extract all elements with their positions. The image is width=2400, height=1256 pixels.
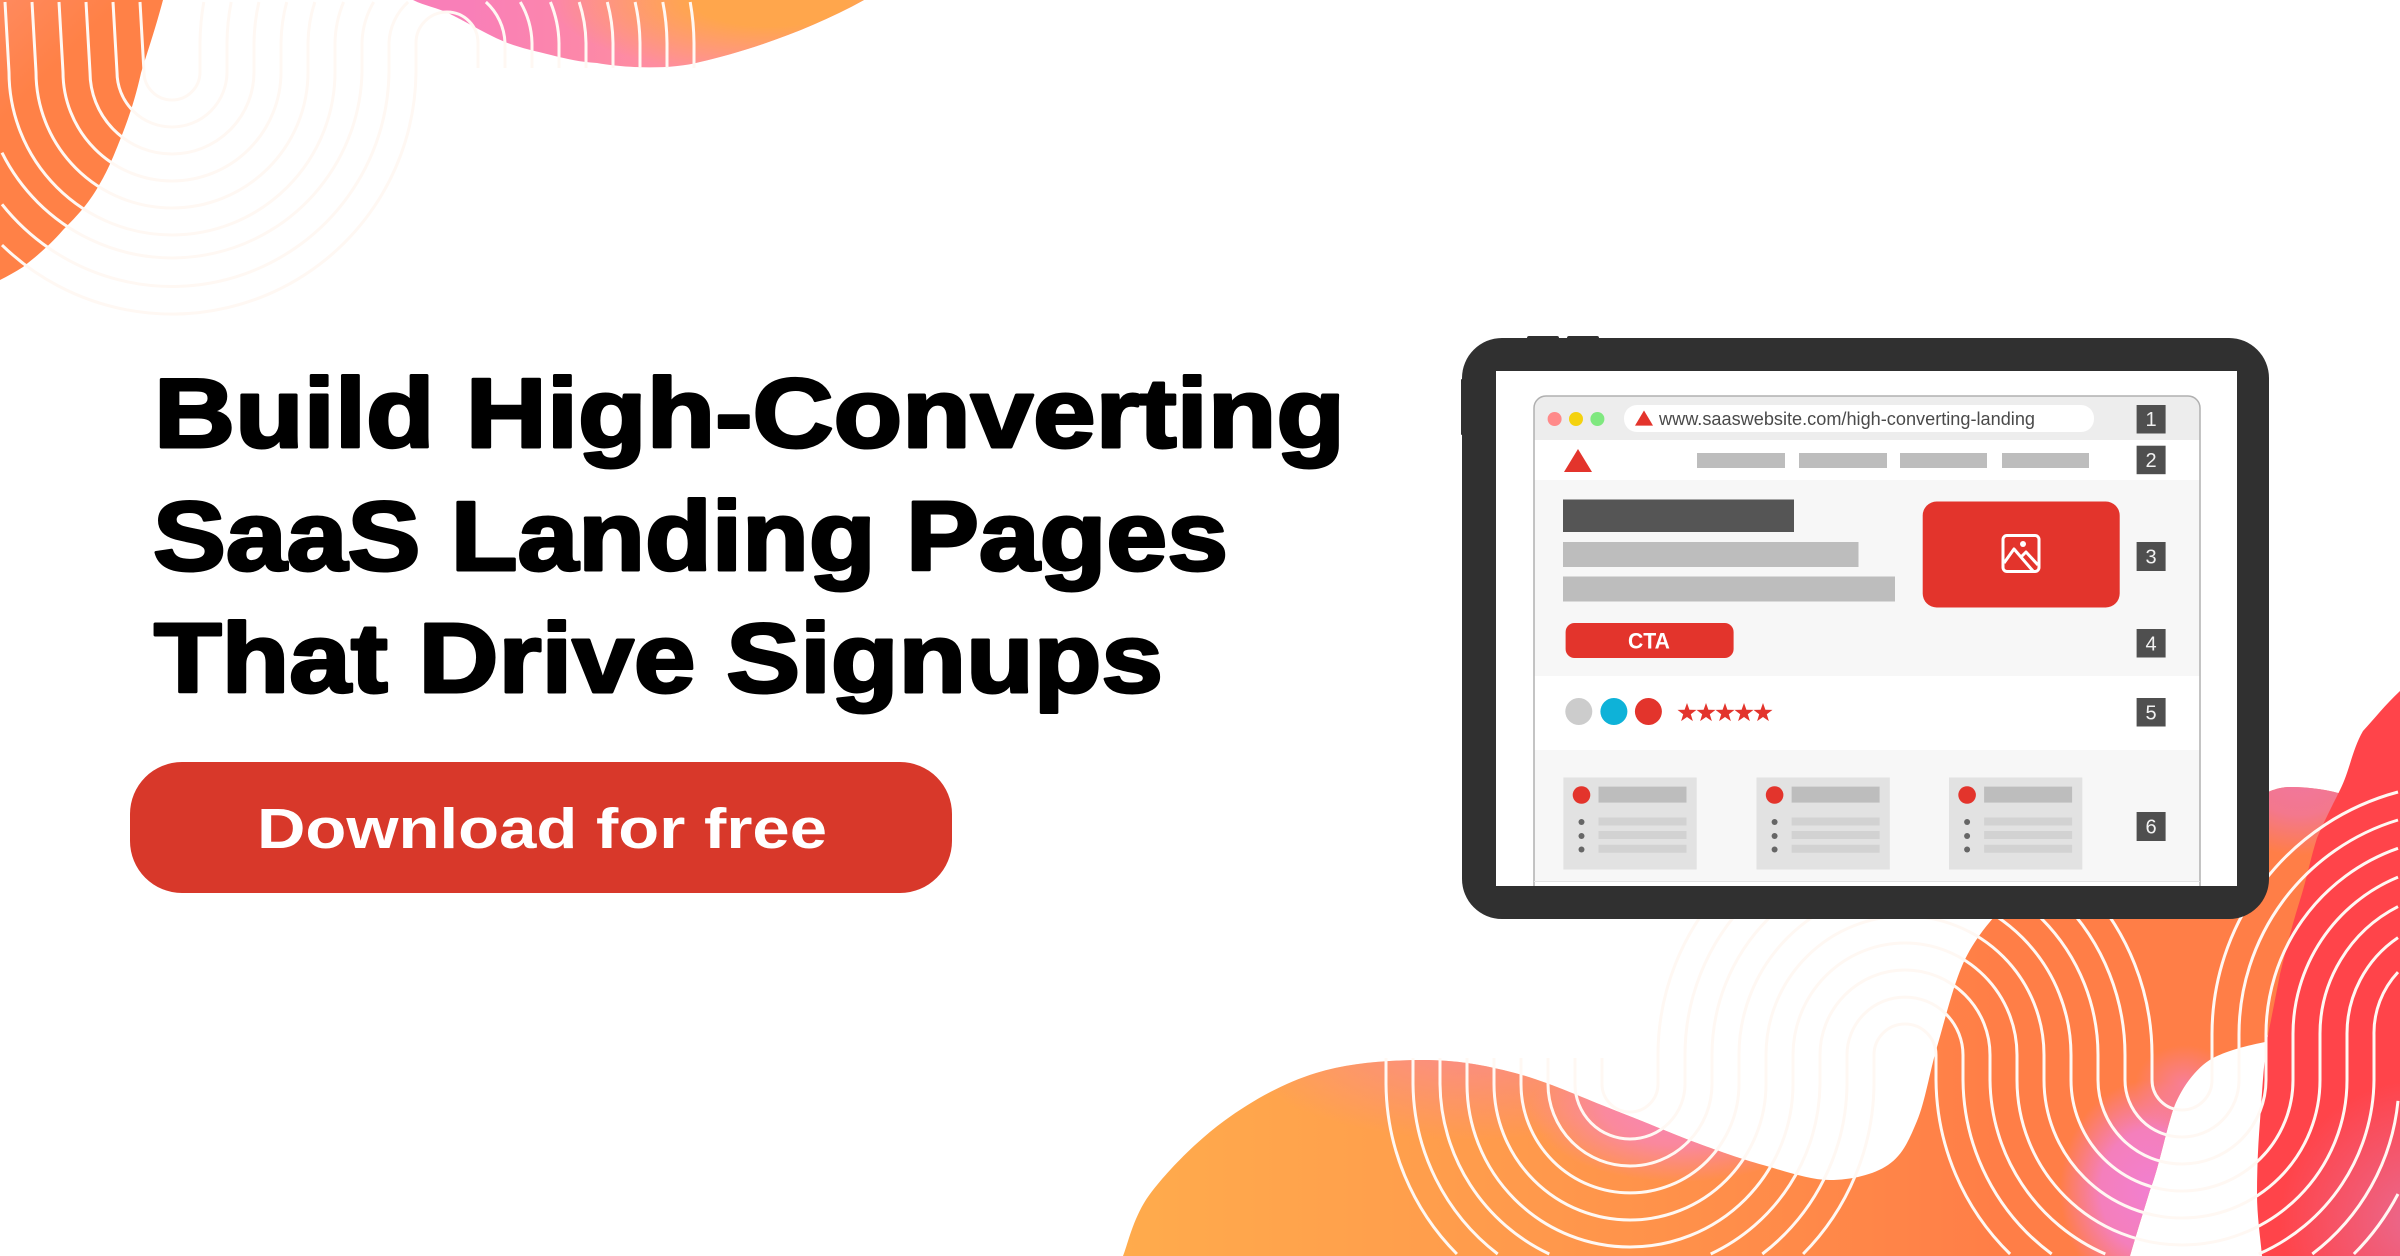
star rating (1678, 703, 1772, 721)
numbered section badges: 5 (2145, 702, 2157, 724)
features section (1534, 750, 2200, 881)
numbered section badges (2137, 405, 2166, 841)
tablet screen (1496, 371, 2237, 886)
title (153, 358, 1345, 713)
concentric wave lines: bottom right (1386, 792, 2398, 1254)
numbered section badges: 6 (2145, 816, 2157, 838)
tablet body and buttons (1461, 336, 2269, 919)
blob: top left orange (0, 0, 163, 280)
hero image placeholder (1923, 502, 2120, 608)
blob: right red wave (2257, 691, 2400, 1256)
title: That Drive Signups (154, 603, 1163, 713)
numbered section badges: 4 (2145, 634, 2157, 656)
title: SaaS Landing Pages (153, 481, 1228, 591)
CTA button (1566, 623, 1734, 658)
browser chrome: www.saaswebsite.com/high-converting-landing (1658, 409, 2035, 429)
concentric wave lines: top left (2, 2, 694, 314)
hero section (1534, 480, 2200, 676)
browser outline (1534, 396, 2200, 886)
blob: bottom orange wave (1123, 787, 2345, 1256)
download button (130, 762, 952, 893)
tablet mockup (1461, 336, 2269, 919)
feature card 1 (1563, 778, 1697, 870)
social proof row (1565, 698, 1772, 725)
CTA button: CTA (1628, 628, 1670, 654)
feature card 2 (1756, 778, 1890, 870)
feature card 3 (1949, 778, 2082, 870)
nav bar (1534, 440, 2200, 480)
numbered section badges: 1 (2145, 409, 2157, 431)
blob: top centre pink to orange (413, 0, 864, 67)
browser chrome (1534, 396, 2200, 440)
numbered section badges: 2 (2145, 450, 2157, 472)
download button: Download for free (257, 797, 827, 861)
numbered section badges: 3 (2145, 546, 2157, 568)
title: Build High-Converting (154, 358, 1345, 468)
